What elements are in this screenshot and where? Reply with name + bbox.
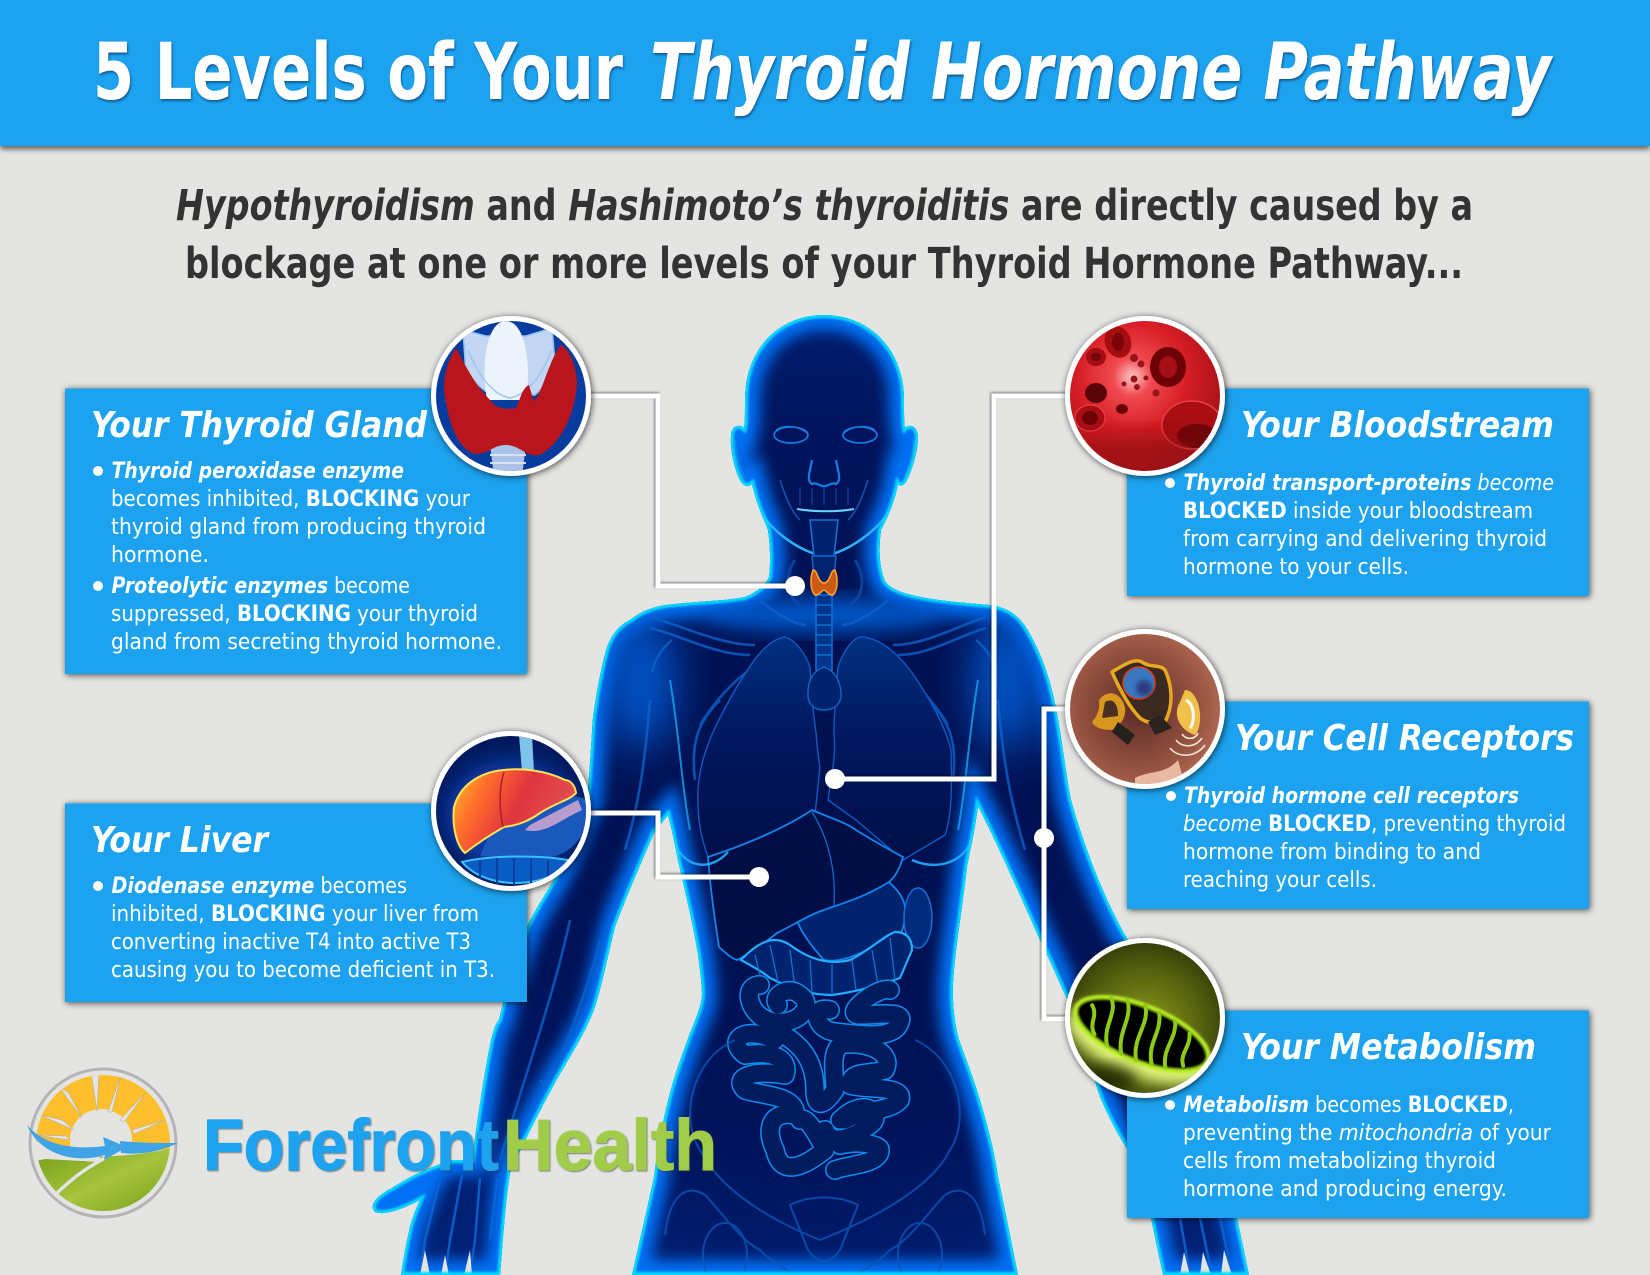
- panel: your liver: [65, 804, 527, 1002]
- icon: metabolism mitochondrion: [1056, 938, 1225, 1101]
- stomach: [797, 882, 905, 961]
- connector: cell receptors and metabolism: [1034, 709, 1068, 1019]
- text block: hormone to your cells.: [1183, 554, 1409, 580]
- icon: thyroid gland: [430, 316, 592, 476]
- text block: [93, 458, 502, 655]
- rim edge: [373, 315, 1249, 1275]
- connector: bloodstream: [825, 396, 1068, 789]
- icon: cell receptors: [1065, 629, 1225, 790]
- logo: Forefront Health: [27, 1069, 717, 1220]
- text block: suppressed, BLOCKING your thyroid: [111, 601, 478, 627]
- connector: thyroid gland: [588, 396, 805, 596]
- intestines: [737, 985, 901, 1170]
- text block: Thyroid transport-proteins become: [1184, 470, 1554, 496]
- icon: bloodstream: [1065, 316, 1225, 476]
- spleen: [904, 888, 932, 948]
- inner blue glow: [373, 315, 1249, 1275]
- heading: Your Cell Receptors: [1235, 718, 1574, 759]
- text block: preventing the mitochondria of your: [1183, 1120, 1552, 1146]
- colon: [741, 932, 912, 995]
- text block: reaching your cells.: [1183, 867, 1377, 893]
- panel: your metabolism: [1127, 1010, 1589, 1218]
- subtitle: [176, 181, 1473, 289]
- heart blob: [808, 667, 841, 710]
- text block: causing you to become deficient in T3.: [111, 957, 495, 983]
- text block: Thyroid peroxidase enzyme: [112, 458, 404, 484]
- text block: hormone and producing energy.: [1183, 1176, 1507, 1202]
- heading: Your Bloodstream: [1241, 405, 1554, 446]
- text block: hormone.: [111, 542, 209, 568]
- heading: Your Thyroid Gland: [91, 405, 428, 446]
- subtitle: blockage at one or more levels of your Thyroid Hormone Pathway...: [185, 239, 1463, 289]
- text block: from carrying and delivering thyroid: [1183, 526, 1547, 552]
- header bar: [0, 0, 1650, 146]
- lungs: [698, 637, 951, 860]
- text block: BLOCKED inside your bloodstream: [1183, 498, 1533, 524]
- text block: thyroid gland from producing thyroid: [111, 514, 486, 540]
- icon: logo emblem: [27, 1069, 180, 1220]
- neck structures: [788, 560, 862, 605]
- text block: converting inactive T4 into active T3: [111, 929, 471, 955]
- title: 5 Levels of Your: [93, 28, 623, 118]
- text block: [1166, 783, 1566, 893]
- text block: Metabolism becomes BLOCKED,: [1184, 1092, 1514, 1118]
- title: [93, 28, 1554, 118]
- thyroid: [811, 570, 837, 595]
- text block: [93, 873, 495, 983]
- text block: inhibited, BLOCKING your liver from: [111, 901, 479, 927]
- text block: Proteolytic enzymes become: [112, 573, 410, 599]
- panel: your thyroid gland: [65, 388, 527, 674]
- text block: hormone from binding to and: [1183, 839, 1481, 865]
- face: [735, 427, 914, 520]
- text block: Diodenase enzyme becomes: [112, 873, 407, 899]
- anatomical body figure: [373, 315, 1249, 1275]
- panel: your bloodstream: [1127, 388, 1589, 596]
- pelvis: [665, 1040, 985, 1275]
- clavicles, ribs: [500, 600, 1105, 1160]
- text block: [1165, 470, 1554, 580]
- text block: [1165, 1092, 1552, 1202]
- text block: becomes inhibited, BLOCKING your: [111, 486, 471, 512]
- text block: Thyroid hormone cell receptors: [1184, 783, 1519, 809]
- breast curves: [675, 845, 728, 865]
- logo wordmark: Health: [503, 1106, 717, 1186]
- logo wordmark: Forefront: [203, 1106, 499, 1186]
- icon: liver: [430, 731, 592, 891]
- hand bones: [420, 1175, 1232, 1275]
- panel: your cell receptors: [1127, 702, 1589, 909]
- heading: Your Metabolism: [1241, 1027, 1536, 1068]
- text block: gland from secreting thyroid hormone.: [111, 629, 502, 655]
- text block: cells from metabolizing thyroid: [1183, 1148, 1496, 1174]
- heading: Your Liver: [91, 820, 270, 861]
- connector: liver: [588, 813, 769, 887]
- trachea: [810, 520, 838, 556]
- logo wordmark: [203, 1106, 717, 1186]
- liver: [708, 810, 903, 960]
- text block: become BLOCKED, preventing thyroid: [1183, 811, 1566, 837]
- subtitle: Hypothyroidism and Hashimoto’s thyroiditis are directly caused by a: [176, 181, 1473, 231]
